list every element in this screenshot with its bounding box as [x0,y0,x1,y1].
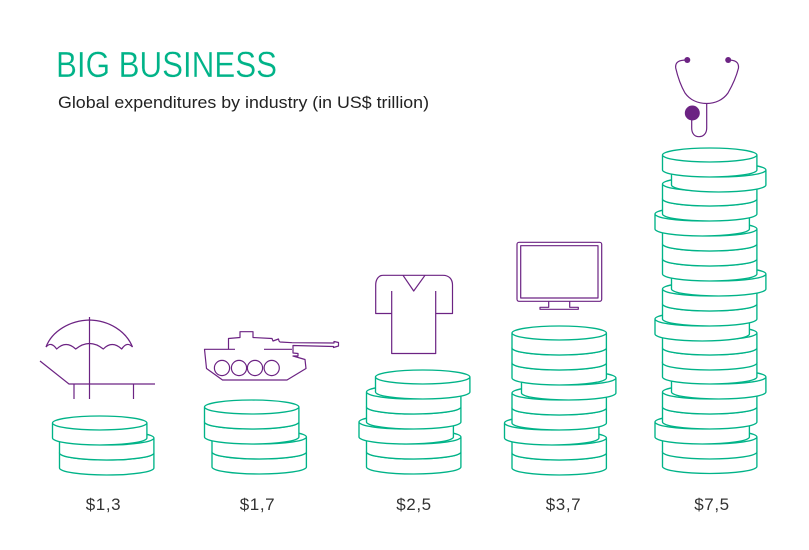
coin stack: $2,5 [359,370,470,474]
icon: stethoscope [676,57,739,137]
icon: t-shirt [376,275,452,354]
coin stack: $7,5 [655,148,766,474]
coin stack: $1,3 [52,416,154,475]
value label: $2,5: $2,5 [396,495,432,514]
subtitle: Global expenditures by industry (in US$ trillion) [58,93,429,112]
value label: $3,7: $3,7 [546,495,581,514]
coin stack: $3,7 [504,326,616,475]
icon: umbrella and sun lounger [40,317,155,399]
value label: $1,7: $1,7 [240,495,275,514]
icon: tank [204,332,338,380]
value label: $7,5: $7,5 [694,495,730,514]
coin stack: $1,7 [204,400,306,474]
icon: computer monitor [517,242,602,309]
title: BIG BUSINESS [56,44,277,85]
value label: $1,3: $1,3 [86,495,121,514]
